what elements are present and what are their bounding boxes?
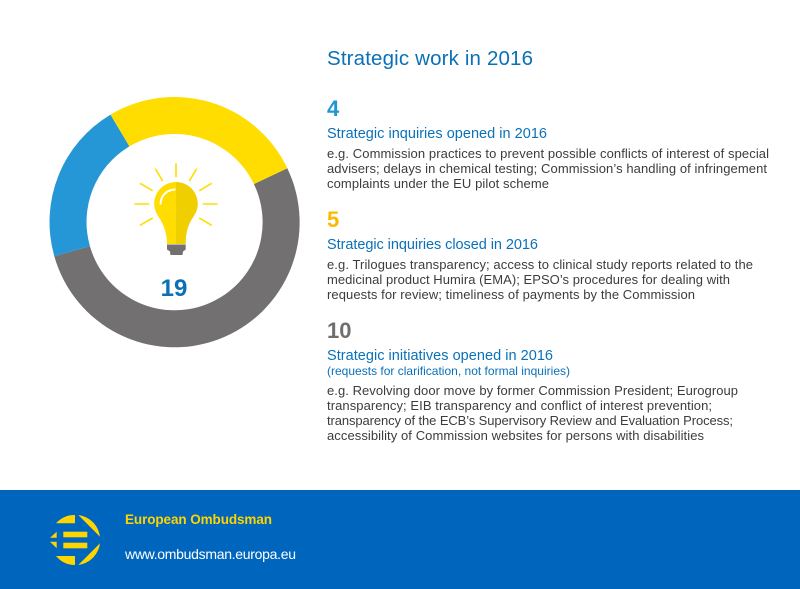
donut segment: inquiries closed (yellow) bbox=[110, 97, 287, 184]
text block: strategic inquiries closed bbox=[327, 207, 753, 302]
footer organisation name: European Ombudsman bbox=[125, 512, 272, 527]
description: inquiries opened: advisers; delays in chemical testing; Commission’s handling of infringement bbox=[327, 161, 767, 176]
description: initiatives opened: accessibility of Commission websites for persons with disabilities bbox=[327, 428, 704, 443]
text block: strategic inquiries opened bbox=[327, 96, 769, 191]
donut segment: inquiries opened (blue) bbox=[50, 115, 129, 256]
donut total: 19 bbox=[161, 275, 187, 302]
icon: light bulb bbox=[134, 163, 218, 255]
heading: inquiries closed: Strategic inquiries closed in 2016 bbox=[327, 237, 538, 253]
donut chart with light bulb bbox=[50, 97, 300, 347]
subheading: requests for clarification: (requests for clarification, not formal inquiries) bbox=[327, 364, 570, 378]
description: inquiries closed: requests for review; timeliness of payments by the Commission bbox=[327, 287, 695, 302]
heading: initiatives opened: Strategic initiatives opened in 2016 bbox=[327, 348, 553, 364]
description: initiatives opened: transparency; EIB transparency and conflict of interest prevention; bbox=[327, 398, 712, 413]
description: inquiries closed: medicinal product Humira (EMA); EPSO’s procedures for dealing with bbox=[327, 272, 730, 287]
footer website: www.ombudsman.europa.eu bbox=[124, 546, 296, 562]
number: 10: 10 bbox=[327, 318, 351, 343]
text block: strategic initiatives opened bbox=[327, 318, 738, 443]
footer band bbox=[0, 490, 800, 589]
description: inquiries opened bbox=[327, 146, 769, 191]
description: inquiries opened: complaints under the EU pilot scheme bbox=[327, 176, 549, 191]
description: initiatives opened: e.g. Revolving door move by former Commission President; Eurogroup bbox=[327, 383, 738, 398]
donut segment: initiatives (grey) bbox=[54, 168, 300, 347]
number: 4: 4 bbox=[327, 96, 340, 121]
description: initiatives opened: transparency of the ECB’s Supervisory Review and Evaluation Process; bbox=[327, 413, 733, 428]
title: Strategic work in 2016 bbox=[327, 47, 533, 70]
icon: European Ombudsman logo bbox=[50, 515, 100, 565]
description: initiatives opened bbox=[327, 383, 738, 443]
number: 5: 5 bbox=[327, 207, 339, 232]
description: inquiries closed bbox=[327, 257, 753, 302]
heading: inquiries opened: Strategic inquiries opened in 2016 bbox=[327, 126, 547, 142]
description: inquiries closed: e.g. Trilogues transparency; access to clinical study reports related to the bbox=[327, 257, 753, 272]
description: inquiries opened: e.g. Commission practices to prevent possible conflicts of interest of special bbox=[327, 146, 769, 161]
